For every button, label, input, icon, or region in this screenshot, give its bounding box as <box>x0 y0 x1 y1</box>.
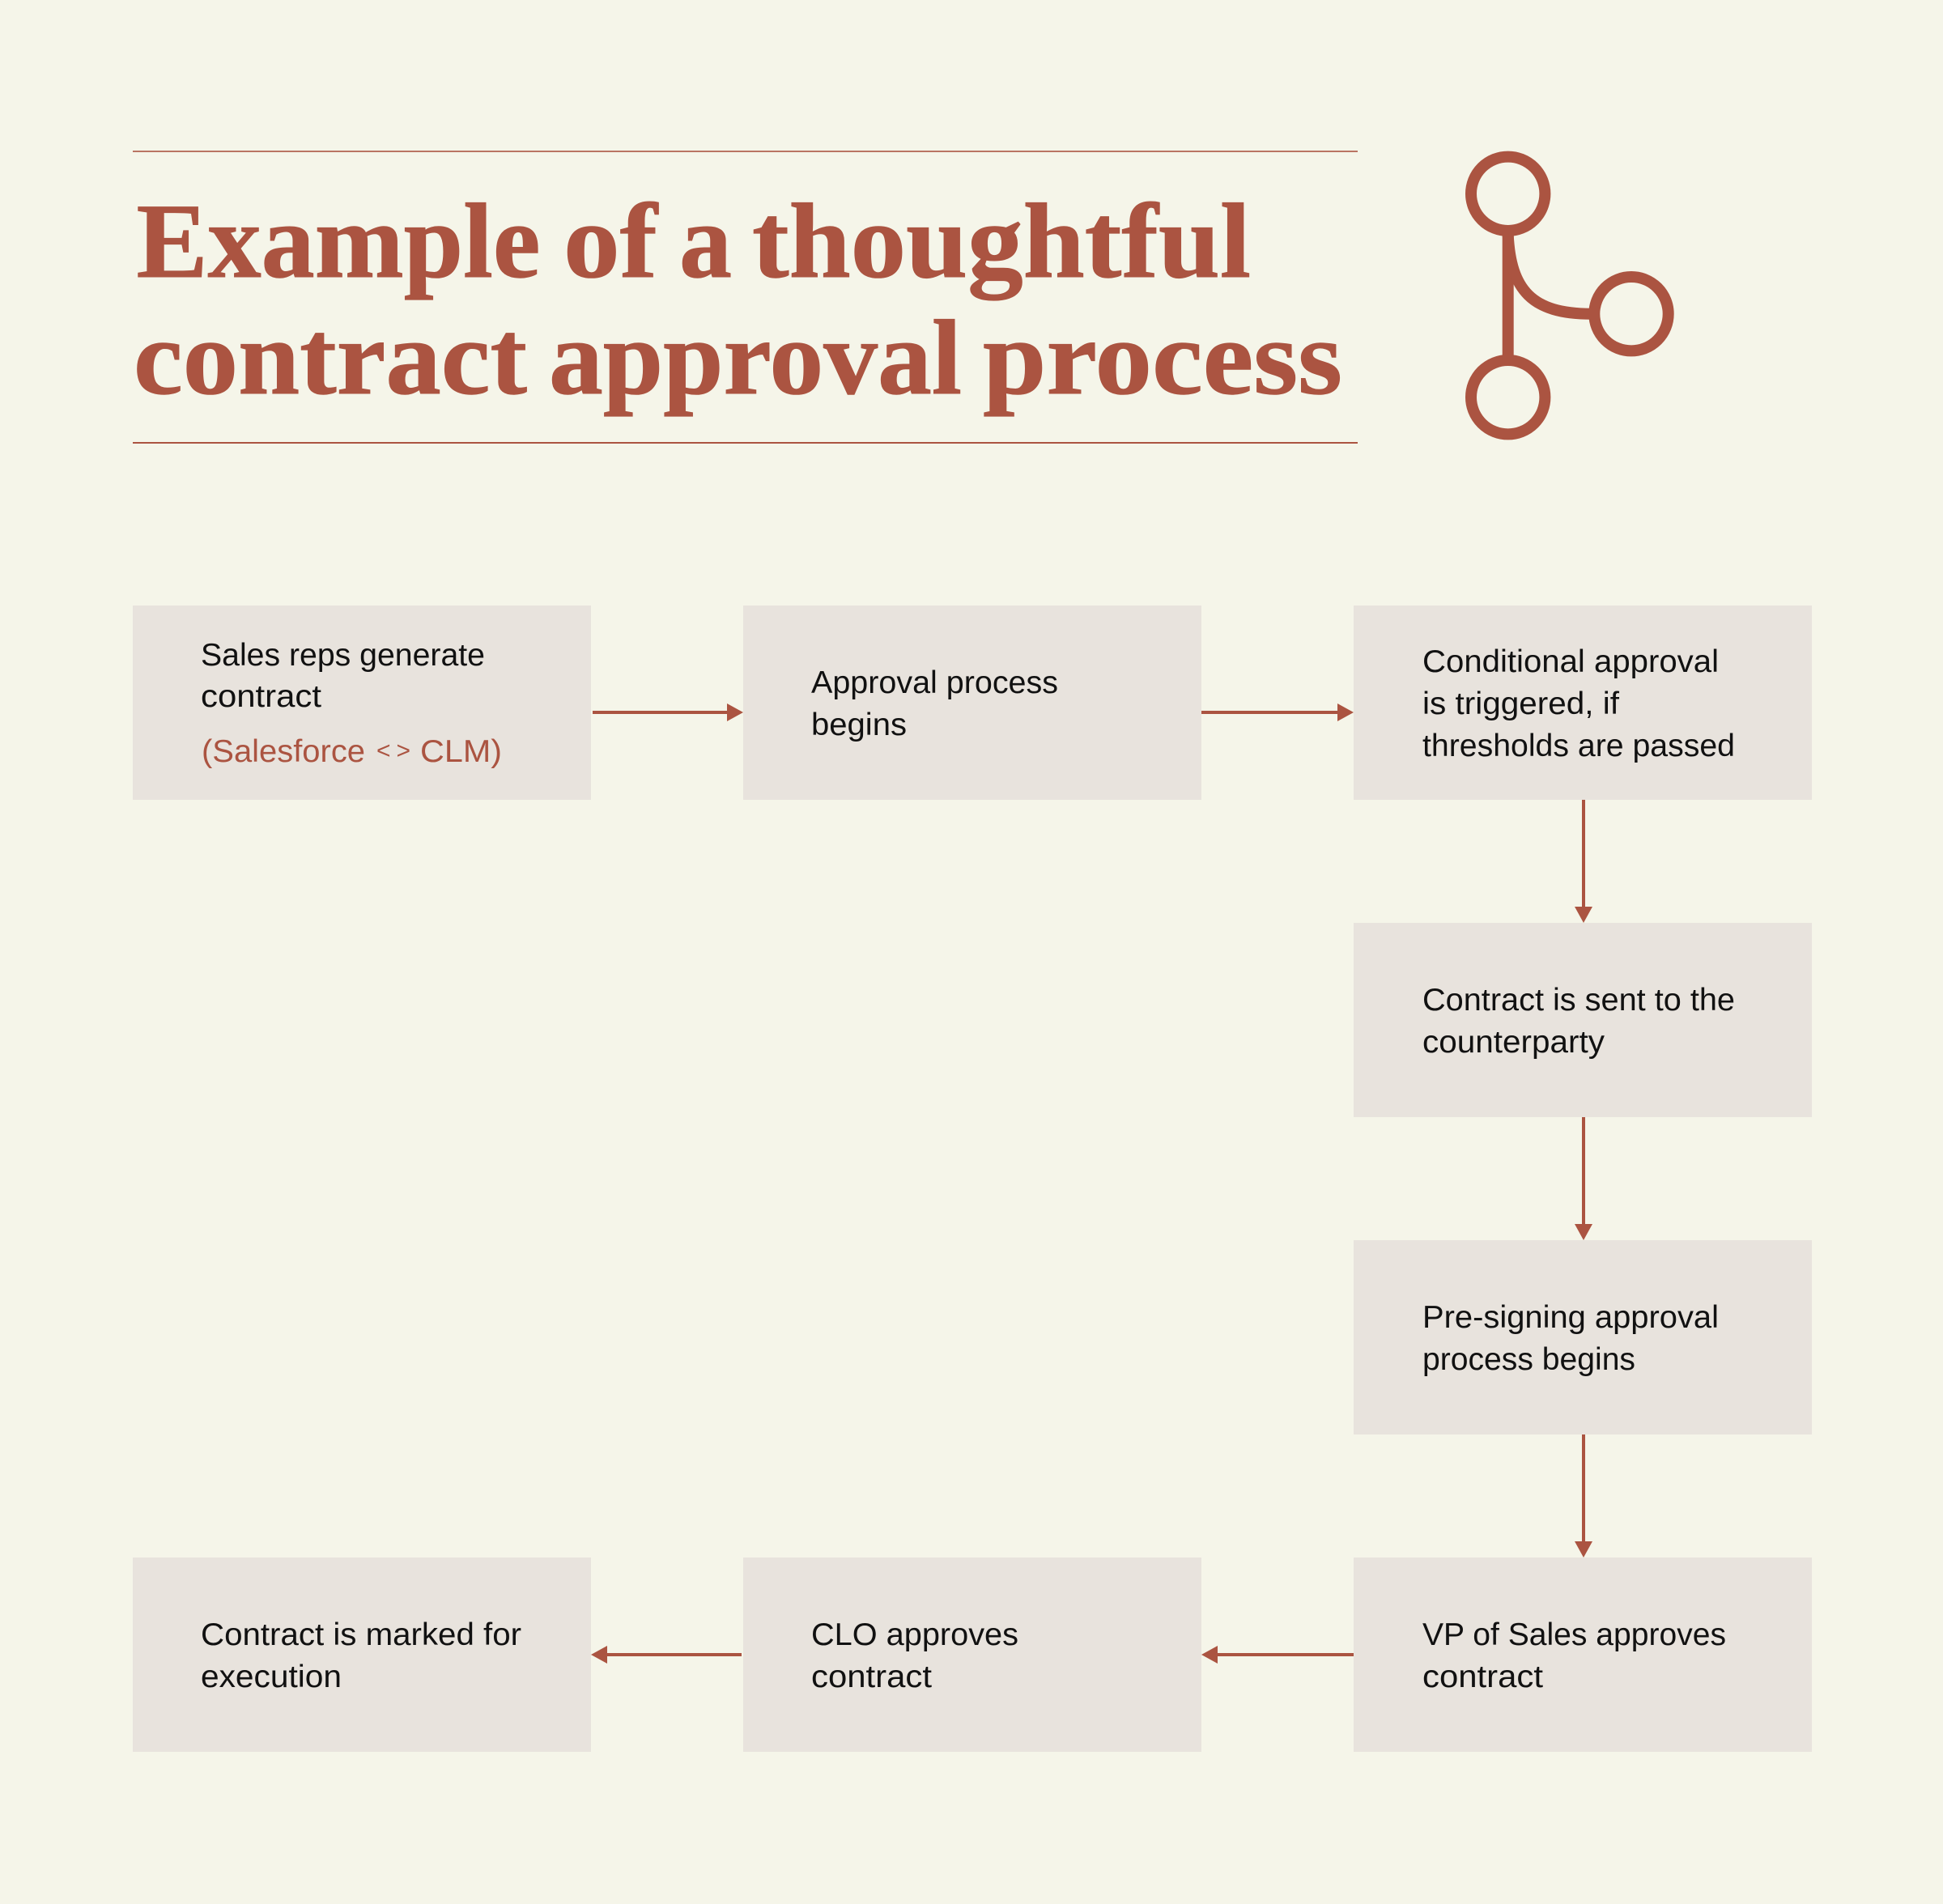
step 7: CLO approves: contract <box>811 1660 932 1694</box>
step 3: conditional approval <box>1354 606 1812 800</box>
step 5: pre-signing approval: Pre-signing approval <box>1422 1300 1719 1335</box>
step 1: sales reps generate contract: contract <box>201 679 321 714</box>
step 1: sales reps generate contract: Sales reps generate <box>201 638 485 673</box>
step 6: VP of Sales approves <box>1354 1558 1812 1752</box>
arrow: step 1 to step 2 <box>593 703 743 721</box>
step 8: contract marked for execution: Contract is marked for <box>201 1617 521 1652</box>
icon: branching workflow <box>1471 157 1669 434</box>
title block <box>133 151 1358 444</box>
step 3: conditional approval: is triggered, if <box>1422 686 1619 721</box>
step 1: sales reps generate contract: (Salesforce <box>202 734 365 769</box>
step 5: pre-signing approval: process begins <box>1422 1342 1635 1377</box>
step 2: approval process begins: begins <box>811 708 907 742</box>
step 7: CLO approves <box>743 1558 1201 1752</box>
title block: Example <box>136 181 541 300</box>
step 4: contract sent to counterparty <box>1354 923 1812 1117</box>
arrow: step 6 to step 7 <box>1201 1646 1354 1664</box>
step 6: VP of Sales approves: contract <box>1422 1660 1543 1694</box>
step 7: CLO approves: CLO approves <box>811 1617 1018 1652</box>
step 1: sales reps generate contract <box>133 606 591 800</box>
step 2: approval process begins <box>743 606 1201 800</box>
title block: of <box>563 181 659 300</box>
step 8: contract marked for execution: execution <box>201 1660 342 1694</box>
step 3: conditional approval: thresholds are passed <box>1422 729 1735 763</box>
step 1: sales reps generate contract: CLM) <box>420 734 502 769</box>
step 3: conditional approval: Conditional approval <box>1422 644 1719 679</box>
arrow: step 2 to step 3 <box>1201 703 1354 721</box>
arrow: step 5 to step 6 <box>1575 1434 1592 1558</box>
title block: a <box>679 181 732 300</box>
arrow: step 7 to step 8 <box>591 1646 742 1664</box>
step 4: contract sent to counterparty: counterparty <box>1422 1025 1605 1060</box>
title block: approval <box>549 298 962 417</box>
title block: thoughtful <box>752 181 1251 300</box>
arrow: step 4 to step 5 <box>1575 1117 1592 1240</box>
step 6: VP of Sales approves: VP of Sales approves <box>1422 1617 1726 1652</box>
step 5: pre-signing approval <box>1354 1240 1812 1434</box>
step 1: sales reps generate contract: <> <box>376 737 410 764</box>
step 8: contract marked for execution <box>133 1558 591 1752</box>
step 4: contract sent to counterparty: Contract is sent to the <box>1422 983 1735 1018</box>
arrow: step 3 to step 4 <box>1575 800 1592 923</box>
title block: process <box>983 298 1342 417</box>
title block: contract <box>134 298 527 417</box>
step 2: approval process begins: Approval process <box>811 665 1058 700</box>
